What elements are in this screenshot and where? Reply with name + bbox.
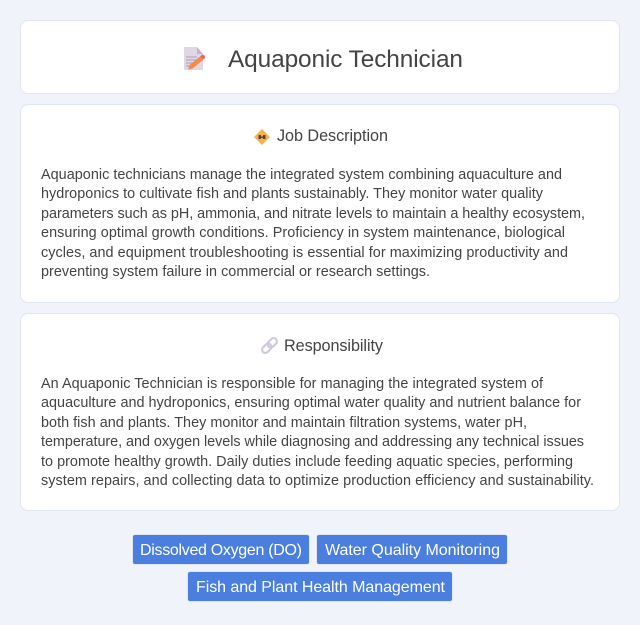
tag: dissolved oxygen background [132,534,310,565]
title: Aquaponic Technician [228,46,463,73]
icon: orange diamond [254,129,270,145]
icon: document with pencil [184,47,205,70]
text block: responsibility: system repairs, and collecting data to optimize production efficiency and sustainability. [41,473,594,489]
tag label: water quality monitoring: Water Quality Monitoring [325,542,500,559]
text block: job description: parameters such as pH, ammonia, and nitrate levels to maintain a healthy ecosystem, [41,206,585,222]
panel: title card [20,20,620,94]
tag label: fish and plant health management: Fish and Plant Health Management [196,579,446,596]
text block: responsibility: to promote healthy growth. Daily duties include feeding aquatic species, performing [41,454,573,470]
text block: job description: ensuring optimal growth conditions. Proficiency in system maintenance, biological [41,225,565,241]
text block: responsibility: both fish and plants. They monitor and maintain filtration systems, water pH, [41,415,527,431]
text block: job description: Aquaponic technicians manage the integrated system combining aquaculture and [41,167,562,183]
text block: job description: hydroponics to cultivate fish and plants sustainably. They monitor water quality [41,186,544,202]
tag label: dissolved oxygen: Dissolved Oxygen (DO) [140,542,302,559]
icon: chain link [261,337,278,354]
heading: responsibility: Responsibility [284,337,384,355]
text block: job description: preventing system failure in commercial or research settings. [41,264,430,280]
text block: responsibility: An Aquaponic Technician is responsible for managing the integrated system of [41,376,544,392]
text block: job description [41,167,585,280]
heading: job description: Job Description [277,127,388,145]
tag: fish and plant health background [187,571,453,602]
panel: job description card [20,104,620,303]
text block: job description: cycles, and equipment troubleshooting is essential for maximizing productivity and [41,245,568,261]
text block: responsibility: aquaculture and hydroponics, ensuring optimal water quality and nutrient balance for [41,395,581,411]
text block: responsibility: temperature, and oxygen levels while diagnosing and addressing any technical issues [41,434,584,450]
tag: water quality monitoring background [316,534,508,565]
panel: responsibility card [20,313,620,511]
text block: responsibility [41,376,594,489]
